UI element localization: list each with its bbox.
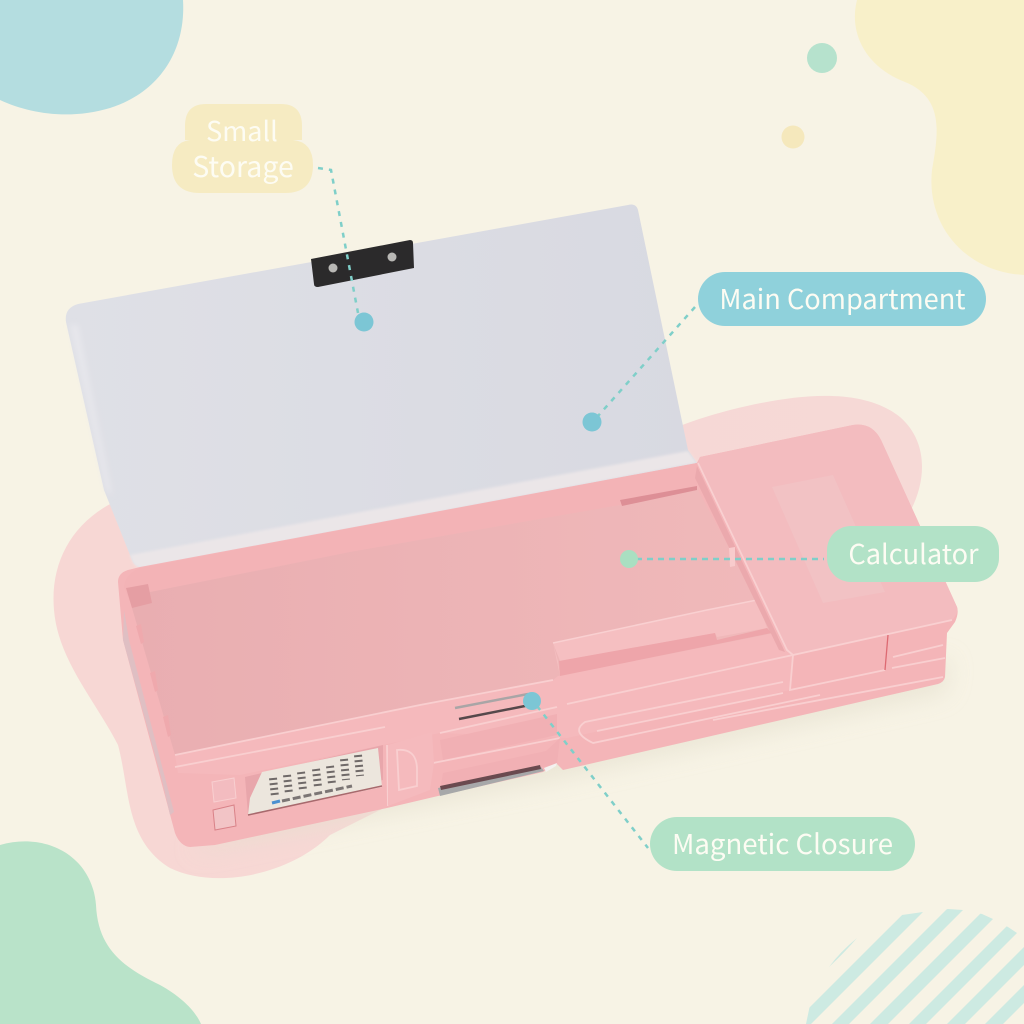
seam [885, 635, 888, 670]
blob: blue top-left [0, 0, 183, 114]
marker dot [354, 312, 374, 332]
marker dot [620, 550, 638, 568]
callout: calculator [620, 526, 999, 582]
pencil case [66, 205, 958, 852]
front top band [175, 633, 793, 775]
calculator sticker slot [245, 745, 383, 815]
stripe pattern bottom-right [793, 905, 1024, 1024]
front panel ridges [175, 645, 945, 806]
upper metal rods [455, 694, 530, 719]
leader line [537, 706, 648, 848]
tray floor [132, 488, 775, 755]
metal hinge clip [311, 240, 414, 287]
left wall side [123, 610, 174, 815]
blob: green bottom-left [0, 841, 201, 1024]
front latch [388, 732, 434, 806]
left wall pegs [136, 624, 171, 737]
marker dot [523, 692, 541, 710]
calculator cover [695, 425, 957, 670]
label text: Calculator [848, 532, 979, 572]
label shape [172, 104, 313, 193]
slide rail [553, 600, 772, 676]
leader line [318, 168, 358, 313]
label text: Small [206, 110, 278, 149]
label pill [827, 526, 999, 582]
slider switch [212, 778, 236, 830]
blob: pink behind case [53, 396, 922, 878]
label pill [650, 817, 915, 871]
open lid [66, 205, 697, 568]
marker dot [582, 412, 602, 432]
label text: Main Compartment [719, 277, 966, 317]
calculator window [772, 475, 885, 603]
decorative dot: mint [807, 43, 837, 73]
front recess shading [440, 714, 557, 760]
cover edge [698, 463, 952, 655]
tab [729, 547, 735, 567]
label text: Magnetic Closure [672, 822, 893, 862]
case shadow [190, 660, 950, 852]
leader line [636, 558, 824, 560]
label text line two: Storage [192, 145, 294, 186]
tray notch [126, 584, 152, 608]
case body outer [118, 425, 958, 847]
label pill [698, 272, 986, 326]
leader line [598, 307, 695, 416]
callout: main compartment [582, 272, 986, 432]
tray rim [124, 463, 697, 608]
lower metal bar [438, 738, 560, 796]
decorative dot: yellow [782, 126, 804, 148]
inner ledge [620, 486, 697, 506]
cover side shadow [695, 466, 785, 652]
blob: yellow top-right [855, 0, 1024, 275]
callout: small storage [172, 104, 374, 332]
callout: magnetic closure [523, 692, 915, 871]
